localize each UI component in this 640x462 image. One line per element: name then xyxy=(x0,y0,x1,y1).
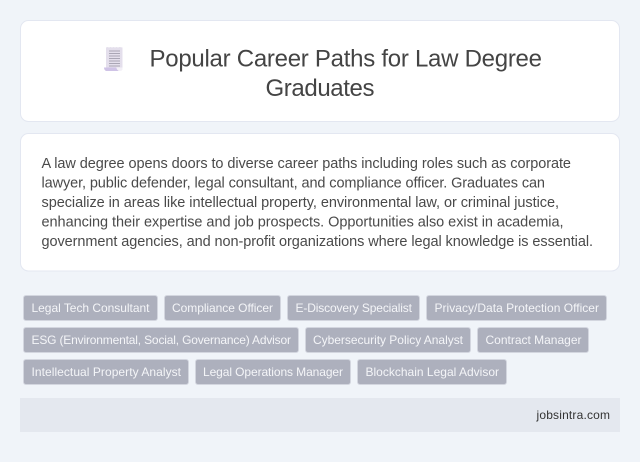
title: Graduates xyxy=(266,75,374,102)
footer xyxy=(20,398,620,432)
tag: Legal Operations Manager: Legal Operations Manager xyxy=(203,365,343,379)
tag: Blockchain Legal Advisor xyxy=(358,360,506,384)
description text: government agencies, and non-profit organizations where legal knowledge is essential. xyxy=(42,234,593,250)
tag list xyxy=(24,296,606,384)
tag: ESG Advisor: ESG (Environmental, Social, Governance) Advisor xyxy=(32,333,291,347)
description text: specialize in areas like intellectual property, environmental law, or criminal justice, xyxy=(42,195,559,211)
tag: E-Discovery Specialist xyxy=(288,296,420,320)
tag: Intellectual Property Analyst: Intellectual Property Analyst xyxy=(32,365,182,379)
tag: Compliance Officer: Compliance Officer xyxy=(172,301,273,315)
tag: Privacy/Data Protection Officer xyxy=(426,296,606,320)
panel: description xyxy=(20,134,620,271)
tag: Blockchain Legal Advisor: Blockchain Legal Advisor xyxy=(366,365,499,379)
title xyxy=(150,46,542,102)
tag: Legal Operations Manager xyxy=(196,360,350,384)
tag: Cybersecurity Policy Analyst xyxy=(306,328,470,352)
tag: Intellectual Property Analyst xyxy=(24,360,188,384)
tag: Legal Tech Consultant xyxy=(24,296,158,320)
tag: Legal Tech Consultant: Legal Tech Consultant xyxy=(32,301,150,315)
tag: E-Discovery Specialist: E-Discovery Specialist xyxy=(296,301,413,315)
tag: Compliance Officer xyxy=(164,296,280,320)
footer source text: jobsintra.com xyxy=(536,408,610,422)
title: Popular Career Paths for Law Degree xyxy=(150,46,542,72)
description text: lawyer, public defender, legal consultant, and compliance officer. Graduates can xyxy=(42,176,545,192)
tag: Contract Manager: Contract Manager xyxy=(486,333,582,347)
panel: title header xyxy=(20,20,620,122)
tag: Privacy/Data Protection Officer: Privacy/Data Protection Officer xyxy=(434,301,599,315)
icon: law document scroll xyxy=(104,47,122,71)
description text: enhancing their expertise and job prospects. Opportunities also exist in academia, xyxy=(42,214,564,230)
tag: ESG Advisor xyxy=(24,328,298,352)
description text xyxy=(42,156,593,250)
description text: A law degree opens doors to diverse career paths including roles such as corporate xyxy=(42,156,571,172)
tag: Cybersecurity Policy Analyst: Cybersecurity Policy Analyst xyxy=(313,333,464,347)
tag: Contract Manager xyxy=(478,328,588,352)
